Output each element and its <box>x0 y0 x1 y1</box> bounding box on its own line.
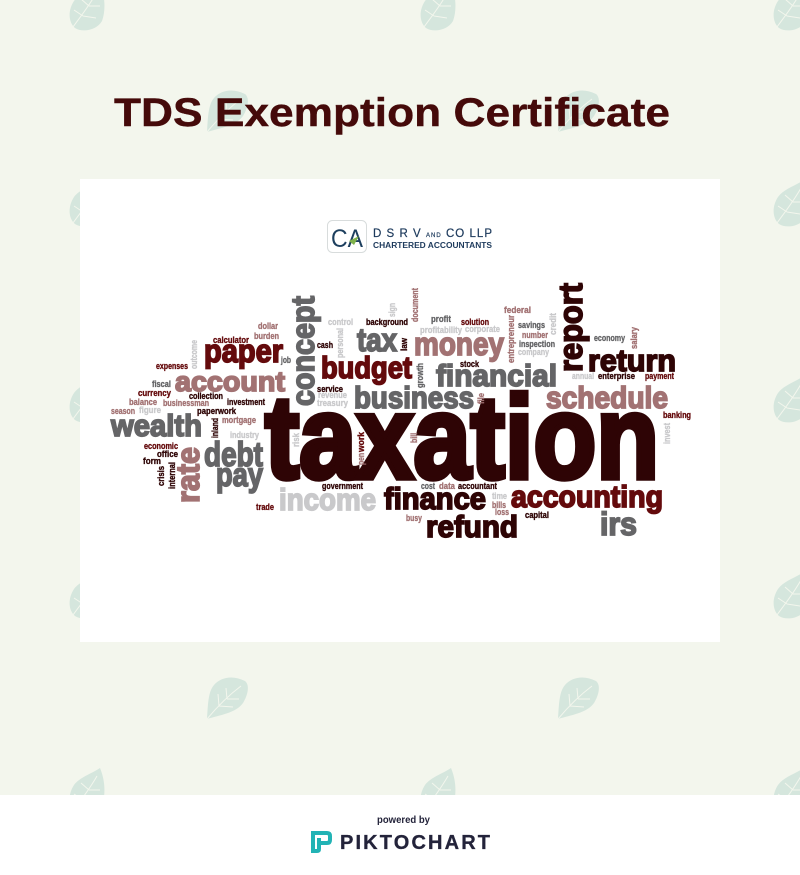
small words: cost <box>421 481 435 491</box>
large words: refund <box>426 509 518 544</box>
small words: economic <box>144 441 178 451</box>
small words: payment <box>645 371 674 381</box>
small words: credit <box>548 313 558 335</box>
footer <box>0 795 800 875</box>
large words: return <box>588 343 676 378</box>
small words: cash <box>317 340 333 350</box>
small words: sign <box>387 303 397 317</box>
large words: debt <box>204 436 263 474</box>
small words: paperwork <box>197 406 237 416</box>
small words: revenue <box>318 390 347 400</box>
small words: outcome <box>189 340 199 369</box>
small words: currency <box>138 388 172 398</box>
small words: personal <box>335 328 345 358</box>
large words: accounting <box>511 479 663 514</box>
large words: budget <box>321 350 412 385</box>
small words: government <box>322 481 363 491</box>
icon: Piktochart logo <box>313 833 330 851</box>
small words: figure <box>139 405 161 415</box>
small words: savings <box>518 320 545 330</box>
small words: file <box>476 393 486 404</box>
large words <box>110 283 676 544</box>
small words: dollar <box>258 321 278 331</box>
large words: irs <box>600 506 637 542</box>
small words: busy <box>406 513 423 523</box>
small words: calculator <box>213 335 249 345</box>
small words: pen <box>356 453 366 465</box>
small words: time <box>492 491 507 501</box>
large words: finance <box>384 481 486 516</box>
large words: pay <box>216 456 264 493</box>
large words: money <box>414 326 504 362</box>
large words: report <box>552 283 589 372</box>
large words: rate <box>170 447 206 503</box>
small words: corporate <box>465 324 500 334</box>
large words: concept <box>285 296 321 406</box>
small words: inspection <box>519 339 555 349</box>
small words: stock <box>460 359 480 369</box>
small words: office <box>157 449 178 459</box>
small words: form <box>143 456 161 466</box>
small words: internal <box>167 462 177 489</box>
small words: economy <box>594 333 626 343</box>
small words: balance <box>129 397 157 407</box>
small words: investment <box>227 397 265 407</box>
logo: D S R V and Co LLP: CA <box>331 225 363 253</box>
large words: tax <box>357 322 397 358</box>
logo: D S R V and Co LLP: D S R V AND CO LLP <box>373 228 492 240</box>
small words: mortgage <box>222 415 256 425</box>
small words: company <box>518 347 550 357</box>
large words: business <box>354 380 474 415</box>
word cloud: taxation <box>110 283 691 544</box>
large words: financial <box>436 358 557 393</box>
small words: risk <box>291 432 301 447</box>
small words: crisis <box>156 466 166 486</box>
title: TDS Exemption Certificate <box>114 91 670 135</box>
small words: salary <box>629 326 639 349</box>
small words: banking <box>663 410 691 420</box>
logo: D S R V and Co LLP: CHARTERED ACCOUNTANTS <box>373 241 493 250</box>
large words: schedule <box>546 380 668 415</box>
small words: entrepreneur <box>506 315 516 363</box>
small words <box>111 288 691 523</box>
small words: work <box>356 431 366 453</box>
small words: federal <box>504 305 531 315</box>
small words: bill <box>409 433 419 443</box>
main word: taxation <box>265 372 659 504</box>
small words: treasury <box>317 398 349 408</box>
powered by text: powered by <box>377 814 430 826</box>
small words: invest <box>662 423 672 444</box>
small words: enterprise <box>598 371 635 381</box>
small words: capital <box>525 510 549 520</box>
small words: control <box>328 317 353 327</box>
small words: businessman <box>163 398 209 408</box>
small words: accountant <box>458 481 497 491</box>
large words: account <box>175 366 285 397</box>
large words: income <box>279 482 376 517</box>
Piktochart wordmark: PIKTOCHART <box>340 832 490 854</box>
small words: burden <box>254 331 279 341</box>
logo: D S R V and Co LLP <box>328 220 493 253</box>
small words: solution <box>461 317 489 327</box>
small words: service <box>317 384 343 394</box>
small words: profit <box>431 314 451 324</box>
large words: paper <box>204 333 283 369</box>
small words: fiscal <box>152 379 171 389</box>
small words: job <box>280 355 291 365</box>
small words: background <box>366 317 408 327</box>
small words: expenses <box>156 361 188 371</box>
small words: bills <box>492 500 506 510</box>
panel: image card <box>80 179 720 642</box>
small words: inland <box>210 418 220 438</box>
small words: growth <box>415 363 425 388</box>
small words: annual <box>572 371 594 381</box>
small words: loss <box>495 507 509 517</box>
small words: number <box>522 330 548 340</box>
small words: document <box>410 288 420 322</box>
large words: wealth <box>110 408 202 443</box>
small words: profitability <box>420 325 463 335</box>
small words: data <box>439 481 456 491</box>
small words: industry <box>230 430 260 440</box>
small words: trade <box>256 502 274 512</box>
small words: collection <box>189 391 223 401</box>
small words: season <box>111 406 135 416</box>
small words: law <box>399 337 409 351</box>
